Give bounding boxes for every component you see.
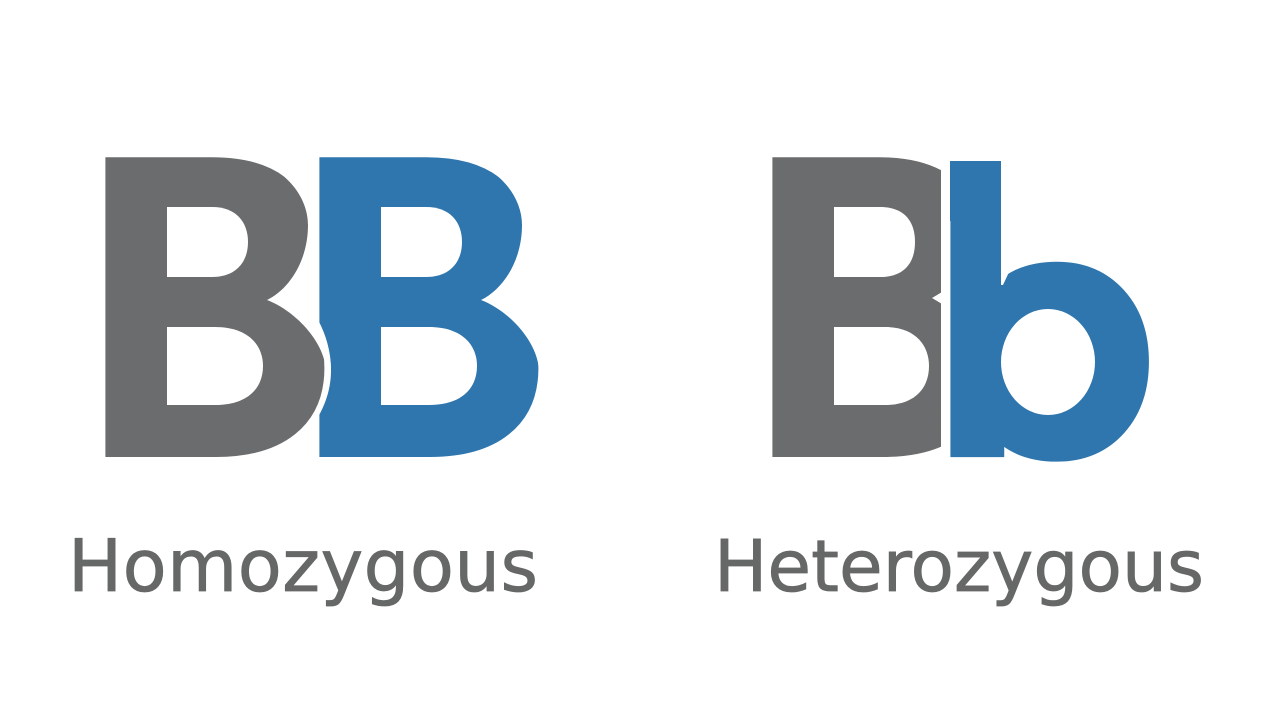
label: Homozygous: Homozygous: [68, 524, 538, 608]
letter: gray B: B: [79, 92, 340, 536]
letter: blue b: b: [928, 155, 1158, 523]
letter: blue B: B: [293, 92, 554, 536]
panel: heterozygous: [720, 157, 1201, 606]
letter: gray B: B: [746, 92, 1007, 536]
letter: gray B: [772, 157, 941, 457]
label: Heterozygous: Heterozygous: [714, 525, 1204, 608]
panel: homozygous: [68, 92, 554, 608]
